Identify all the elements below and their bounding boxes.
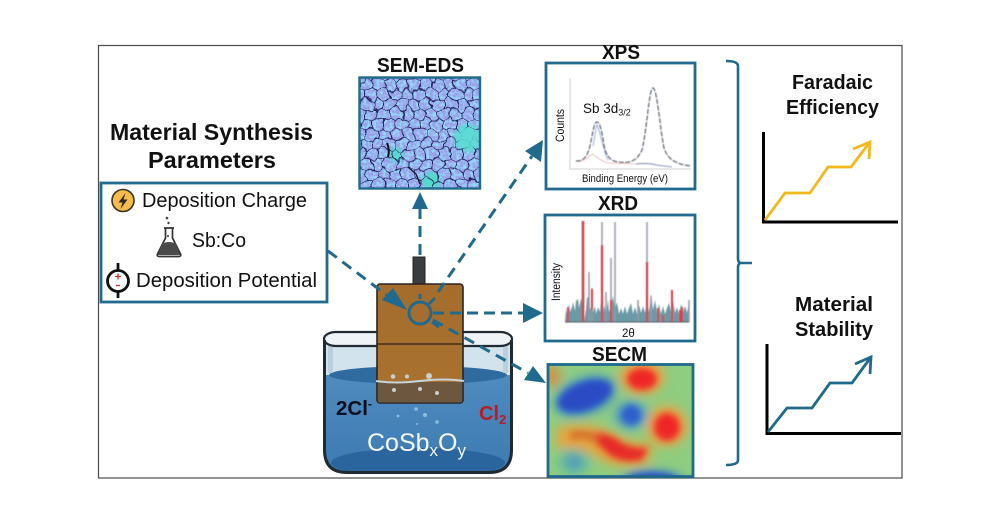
gas bubbles on electrode [391, 373, 439, 395]
bracket [726, 61, 752, 465]
label: deposition potential: Deposition Potential [136, 270, 317, 292]
heading: material synthesis parameters: Material Synthesis [110, 119, 313, 145]
outer frame [98, 46, 902, 478]
rising bubbles in solution [397, 407, 439, 425]
heading: material stability: Material [795, 294, 873, 316]
XPS axes [570, 78, 691, 169]
label: counts axis: Counts [555, 109, 567, 142]
label: Sb to Co ratio: Sb:Co [192, 230, 246, 252]
panel: XPS spectrum [546, 63, 695, 189]
heading: faradaic efficiency [786, 72, 880, 119]
label: Sb 3d3/2: 3/2 [618, 108, 631, 118]
label: catalyst formula: y [458, 441, 466, 460]
heading: faradaic efficiency: Faradaic [792, 72, 873, 94]
infographic canvas [98, 44, 903, 479]
heading: faradaic efficiency: Efficiency [786, 97, 880, 119]
heading: XPS: XPS [602, 42, 640, 64]
heading: material synthesis parameters [110, 119, 313, 173]
heading: material synthesis parameters: Parameters [148, 147, 276, 173]
panel: synthesis parameters [101, 183, 327, 302]
label: intensity axis: Intensity [551, 263, 563, 301]
panel: SEM-EDS micrograph [358, 76, 482, 190]
label: deposition charge: Deposition Charge [142, 190, 307, 212]
arrow: electrode to XPS [438, 140, 543, 292]
label: catalyst formula: x [430, 441, 439, 460]
heading: SEM-EDS: SEM-EDS [377, 55, 464, 77]
label: binding energy axis: Binding Energy (eV) [582, 173, 668, 185]
label: catalyst formula: CoSb [367, 429, 430, 457]
XPS curve [576, 88, 691, 167]
heading: XRD: XRD [598, 193, 638, 215]
label: catalyst formula: O [438, 429, 458, 457]
heading: material stability [795, 294, 874, 341]
panel: SECM heat map [546, 363, 694, 478]
panel: XRD pattern [545, 215, 695, 341]
icon: potential source [108, 263, 128, 298]
label: chlorine gas: 2 [499, 412, 506, 427]
beaker with electrolyte [324, 332, 512, 478]
label: two theta axis: 2θ [622, 328, 635, 340]
probe spot with rays [409, 294, 443, 327]
icon: flask [157, 217, 181, 256]
arrow: electrode to SEM-EDS [412, 192, 428, 255]
arrow: electrode to XRD [433, 303, 543, 323]
XRD chart [565, 221, 689, 322]
label: Sb 3d3/2: Sb 3d [583, 101, 618, 116]
heading: SECM: SECM [592, 344, 647, 366]
label: chloride ions: - [368, 397, 372, 411]
label: chloride ions: 2Cl [336, 398, 367, 420]
label: chlorine gas: Cl [479, 403, 499, 425]
chart: material stability trend [767, 344, 901, 434]
electrode [376, 257, 464, 403]
chart: faradaic efficiency trend [764, 132, 898, 222]
arrow: parameters to electrode [328, 251, 407, 310]
heading: material stability: Stability [795, 319, 874, 341]
icon: lightning charge [112, 190, 134, 212]
arrow: electrode to SECM [433, 320, 546, 383]
